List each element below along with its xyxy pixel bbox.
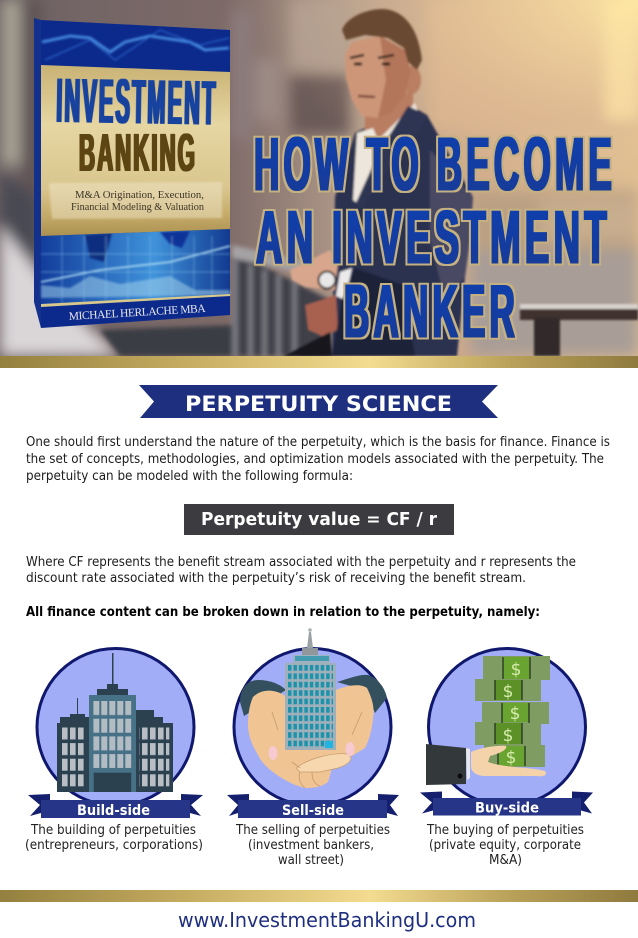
- caption: (private equity, corporate: [429, 838, 581, 853]
- book tagline: [71, 190, 205, 213]
- caption: [426, 823, 584, 868]
- icon: buildings: [57, 653, 173, 792]
- formula box: [184, 504, 454, 535]
- header photo background: INVESTMENT: [56, 66, 218, 139]
- caption: [25, 823, 203, 853]
- book: BANKING: [79, 123, 197, 183]
- man: [284, 9, 473, 356]
- circle: [37, 648, 194, 806]
- ribbon: [227, 794, 399, 819]
- ribbon: Buy-side: [475, 800, 539, 816]
- explanation paragraph: [26, 555, 576, 586]
- panel: build-side: [25, 648, 203, 853]
- book tagline: M&A Origination, Execution,: [75, 190, 204, 201]
- book top chart: [42, 30, 229, 60]
- caption: The building of perpetuities: [30, 823, 196, 838]
- icon: hand and sleeve: [426, 744, 546, 785]
- ribbon: Build-side: [77, 803, 150, 819]
- icon: money stack: $: [503, 682, 513, 702]
- caption: M&A): [489, 853, 522, 868]
- gold bar bottom: [0, 890, 638, 902]
- book: [34, 18, 230, 328]
- icon: money stack: $: [511, 660, 521, 680]
- explanation paragraph: discount rate associated with the perpetuity’s risk of receiving the benefit stream.: [26, 571, 526, 586]
- book tagline: Financial Modeling & Valuation: [71, 202, 205, 213]
- caption: (entrepreneurs, corporations): [25, 838, 203, 853]
- footer url: www.InvestmentBankingU.com: [178, 908, 476, 932]
- ribbon: [28, 794, 203, 819]
- gold bar top: [0, 356, 638, 368]
- book bottom chart: [41, 229, 230, 305]
- section banner: [139, 385, 498, 418]
- panel: buy-side: [420, 648, 593, 868]
- explanation paragraph: Where CF represents the benefit stream associated with the perpetuity and r represents the: [26, 555, 576, 570]
- caption: (investment bankers,: [248, 838, 374, 853]
- book author: MICHAEL HERLACHE MBA: [68, 303, 207, 323]
- ribbon: [420, 792, 593, 816]
- circle: [234, 648, 391, 806]
- caption: The selling of perpetuities: [235, 823, 390, 838]
- icon: money stack: [475, 656, 550, 768]
- caption: wall street): [278, 853, 344, 868]
- header photo background: [0, 0, 638, 356]
- railing: [100, 245, 330, 356]
- caption: The buying of perpetuities: [426, 823, 584, 838]
- bold lead-in: All finance content can be broken down in relation to the perpetuity, namely:: [26, 605, 540, 620]
- circle: [428, 648, 586, 806]
- formula box: Perpetuity value = CF / r: [201, 510, 437, 530]
- icon: money stack: $: [506, 748, 516, 768]
- right rail: [520, 304, 638, 356]
- caption: [235, 823, 390, 868]
- icon: money stack: $: [503, 726, 513, 746]
- intro paragraph: perpetuity can be modeled with the following formula:: [26, 469, 353, 484]
- ribbon: Sell-side: [282, 803, 344, 819]
- main title: [253, 134, 614, 340]
- panel: sell-side: [227, 628, 399, 868]
- intro paragraph: [26, 435, 610, 484]
- section banner: PERPETUITY SCIENCE: [185, 392, 452, 416]
- icon: hands holding building: [240, 628, 387, 788]
- icon: money stack: $: [510, 704, 520, 724]
